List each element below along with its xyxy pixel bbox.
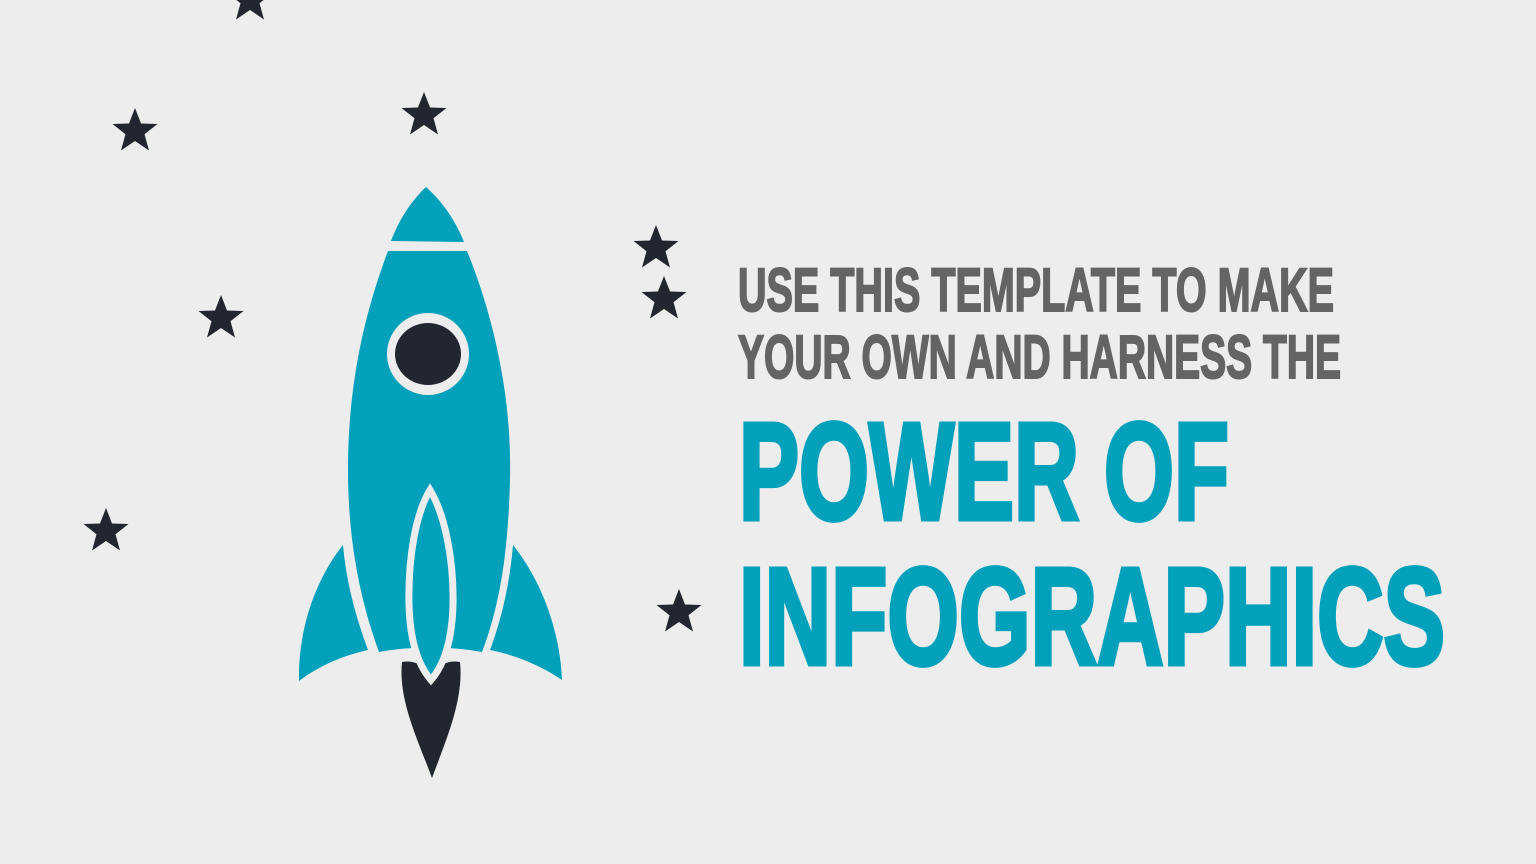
rocket body — [348, 251, 510, 652]
heading: title — [739, 395, 1445, 694]
heading: subtitle — [738, 256, 1341, 391]
rocket fins — [299, 545, 562, 681]
window — [387, 313, 469, 395]
heading: title: POWER OF — [739, 395, 1229, 549]
inner exhaust ellipse — [409, 490, 453, 680]
rocket nose — [391, 187, 464, 242]
flame — [401, 661, 461, 778]
icon: rocket — [299, 187, 562, 778]
stars — [84, 0, 702, 632]
